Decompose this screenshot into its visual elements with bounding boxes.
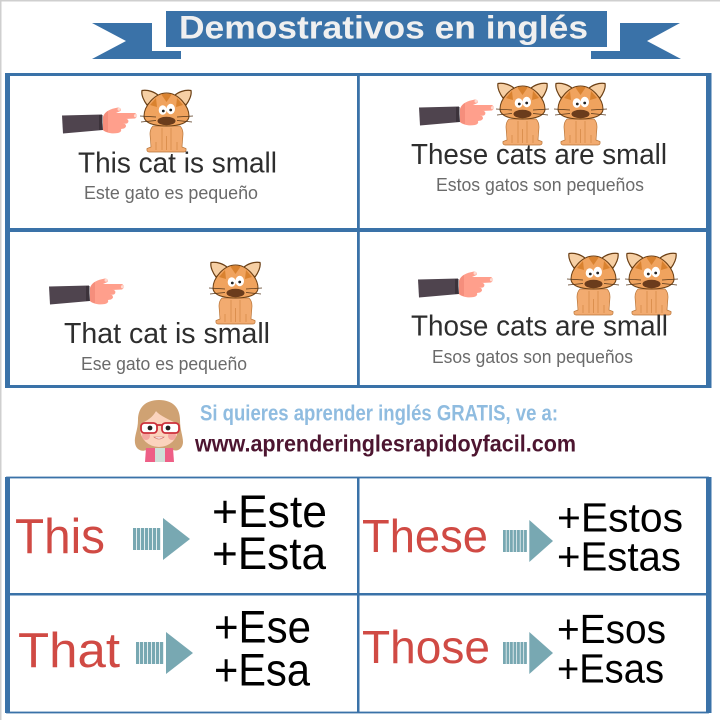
spanish sentence: Ese gato es pequeño [81,354,247,374]
promo line: Si quieres aprender inglés GRATIS, ve a: [200,400,558,426]
panel: this [62,90,277,203]
icon: girl with glasses [135,400,183,462]
icon: cat [140,90,193,152]
translations: +Ese [214,602,311,652]
left ribbon [92,23,181,59]
translation grid [5,477,712,713]
translations [557,494,683,580]
spanish sentence: Este gato es pequeño [84,183,258,203]
translations: +Estos [557,494,683,540]
panel: that [49,262,270,374]
icon: two cats [496,83,607,145]
arrow [503,520,553,562]
translations: +Este [212,486,327,537]
english sentence: That cat is small [64,318,270,350]
arrow [503,632,553,674]
translations: +Estas [557,534,681,580]
panel: those translation [362,606,666,692]
panel: those [411,253,678,367]
panel: these [411,83,667,195]
icon: pointing hand [62,108,137,134]
banner bar [166,11,607,47]
arrow [136,632,193,674]
english sentence: This cat is small [78,148,277,180]
translations [214,602,311,696]
translations: +Esta [212,528,327,579]
spanish sentence: Esos gatos son pequeños [432,347,633,367]
examples grid [5,73,712,388]
website url: www.aprenderinglesrapidoyfacil.com [194,430,576,456]
icon: two cats [567,253,678,315]
title banner [92,10,681,59]
icon: pointing hand [418,272,493,298]
word: those: Those [362,621,490,673]
translations [212,486,327,579]
word: this: This [15,510,105,564]
translations: +Esos [557,606,666,652]
word: these: These [362,510,488,562]
translations: +Esas [557,646,664,692]
panel: that translation [18,602,311,696]
right ribbon [591,23,681,59]
promo strip [135,400,576,462]
title: Demostrativos en inglés [179,10,588,46]
icon: pointing hand [49,278,124,304]
icon: pointing hand [419,100,494,126]
english sentence: These cats are small [411,139,667,171]
panel: these translation [362,494,683,580]
arrow [133,518,190,560]
icon: cat [209,262,262,324]
english sentence: Those cats are small [411,310,668,342]
spanish sentence: Estos gatos son pequeños [436,175,644,195]
panel: this translation [15,486,327,579]
word: that: That [18,624,120,678]
translations: +Esa [214,644,311,696]
translations [557,606,666,692]
